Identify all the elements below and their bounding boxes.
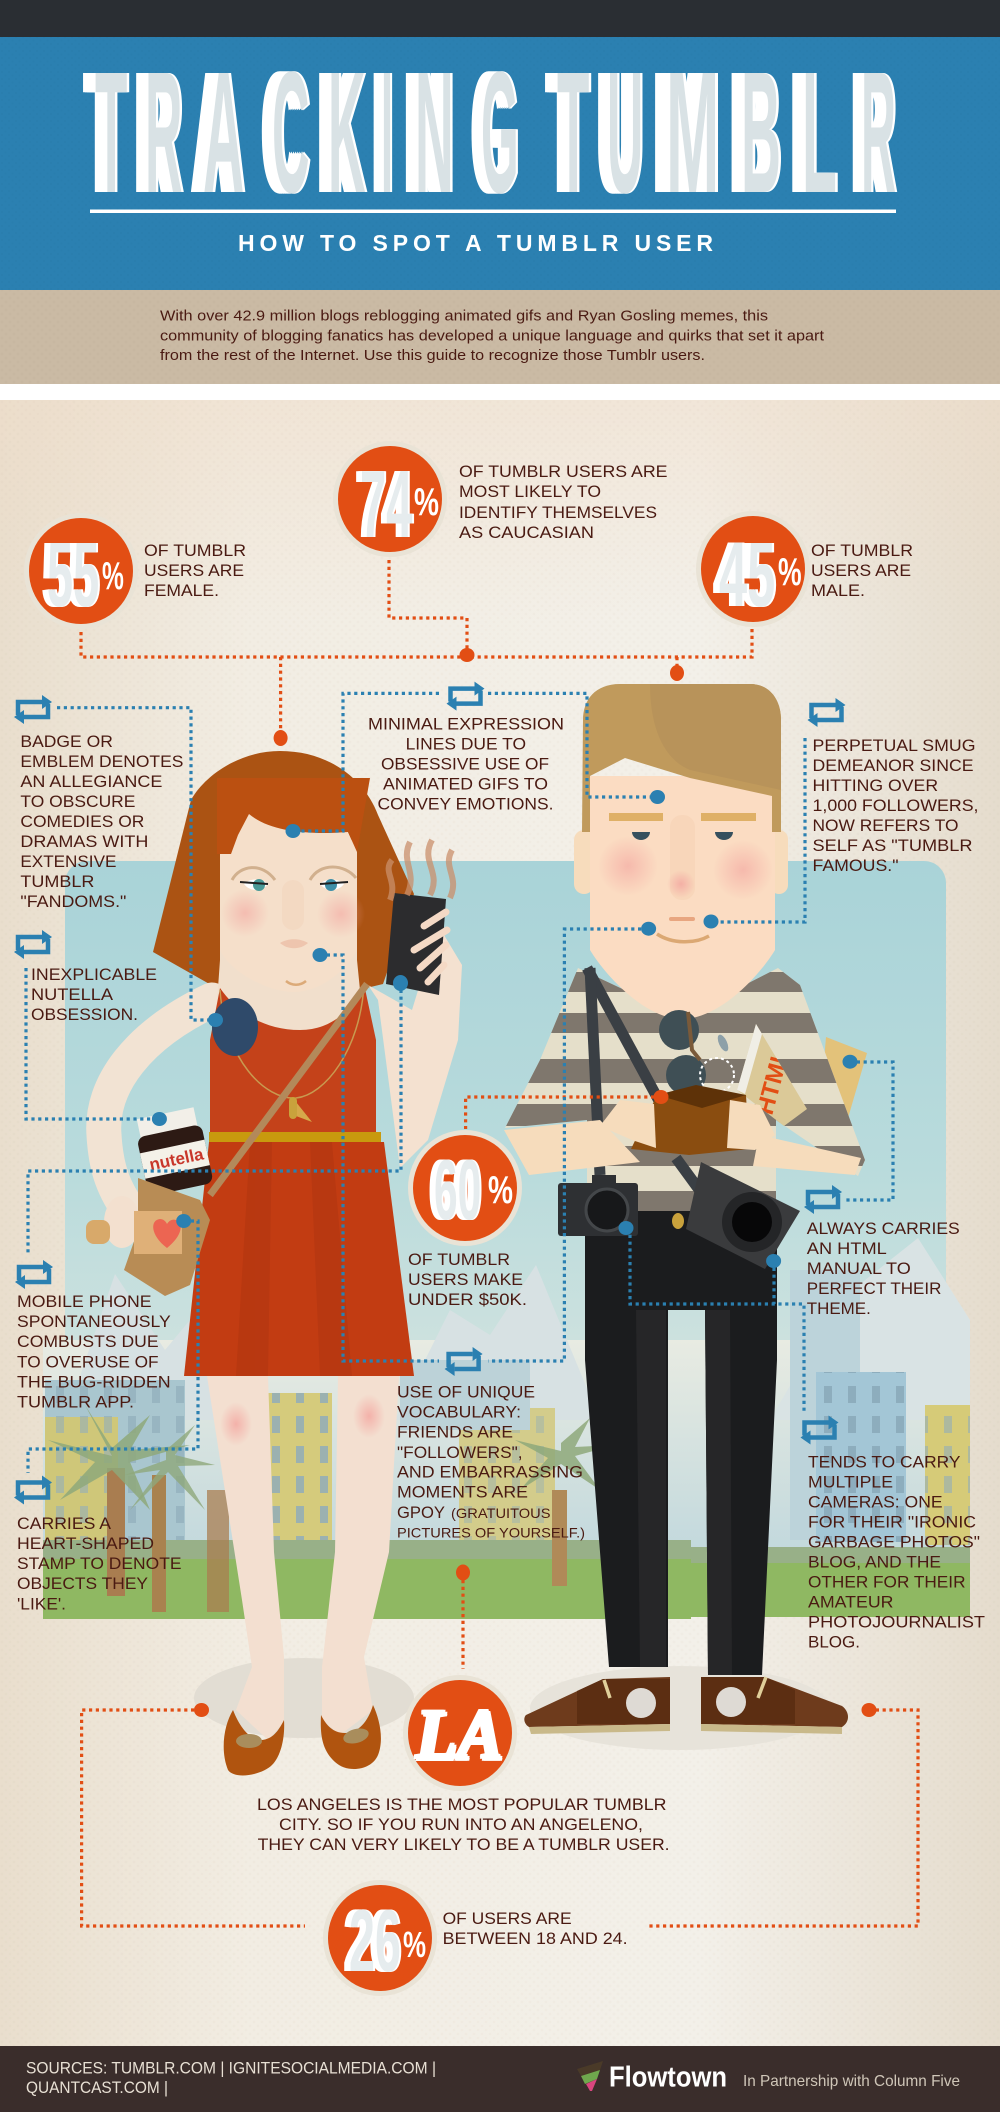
- title: M: [666, 35, 719, 229]
- nutella jar: nutella: [148, 1144, 206, 1174]
- stat badge: 60 percent: 60: [434, 1143, 481, 1238]
- icon: repeat, manual note: [804, 1185, 842, 1214]
- title: R: [861, 35, 896, 229]
- stat badge: LA: [403, 1675, 517, 1791]
- text: 26 percent age: OF USERS ARE: [443, 1910, 572, 1928]
- man pants: [585, 1205, 777, 1675]
- footer sources: SOURCES: TUMBLR.COM | IGNITESOCIALMEDIA.COM |: [26, 2058, 436, 2078]
- woman shoes: [224, 1710, 284, 1775]
- woman bangs: [217, 778, 370, 854]
- title: [83, 35, 898, 229]
- icon: repeat, phone note: [15, 1260, 53, 1289]
- text: perpetual smug demeanor: [812, 737, 978, 875]
- text: unique vocabulary: "FOLLOWERS",: [397, 1444, 523, 1462]
- stat badge: 60 percent: [408, 1130, 522, 1246]
- man shoes: [524, 1677, 848, 1734]
- palm trees: [48, 1405, 615, 1612]
- man forearms and box: [504, 1085, 861, 1175]
- stat badge: 26 percent: %: [403, 1924, 426, 1965]
- text: perpetual smug demeanor: SELF AS "TUMBLR: [812, 837, 973, 855]
- text: nutella obsession: NUTELLA: [31, 986, 113, 1004]
- text: unique vocabulary: MOMENTS ARE: [397, 1484, 528, 1502]
- text: mobile phone combusts: THE BUG-RIDDEN: [17, 1374, 171, 1392]
- text: multiple cameras: BLOG.: [808, 1634, 860, 1652]
- text: 26 percent age: BETWEEN 18 AND 24.: [443, 1930, 628, 1948]
- text: heart stamp: STAMP TO DENOTE: [17, 1555, 182, 1573]
- text: mobile phone combusts: MOBILE PHONE: [17, 1293, 152, 1311]
- text: nutella obsession: [31, 966, 157, 1024]
- figure: woman: [86, 751, 462, 1775]
- text: minimal expression lines: LINES DUE TO: [406, 736, 526, 754]
- icon: repeat, cameras note: [800, 1416, 838, 1444]
- text: nutella obsession: INEXPLICABLE: [31, 966, 157, 984]
- icon: flowtown flag: [577, 2061, 603, 2091]
- text: heart stamp: [17, 1515, 182, 1614]
- figure: man: [500, 684, 870, 1734]
- title: R: [145, 35, 182, 229]
- text: multiple cameras: FOR THEIR "IRONIC: [808, 1514, 976, 1532]
- stat badge: 45 percent: [696, 511, 810, 627]
- text: minimal expression lines: MINIMAL EXPRESSION: [368, 716, 564, 734]
- stat badge: 60 percent: %: [488, 1169, 513, 1212]
- text: html manual: ALWAYS CARRIES: [807, 1220, 960, 1238]
- intro text: [160, 308, 825, 364]
- footer sources: [26, 2058, 436, 2097]
- text: minimal expression lines: OBSESSIVE USE OF: [381, 756, 549, 774]
- text: los angeles: LOS ANGELES IS THE MOST POPULAR TUMBLR: [257, 1796, 667, 1814]
- badge emblem: [212, 998, 258, 1056]
- stat badge: 55 percent: %: [102, 555, 124, 598]
- orange connectors: [81, 560, 918, 1926]
- text: badge or emblem: TO OBSCURE: [20, 793, 135, 811]
- text: 60 percent under 50k: [408, 1251, 527, 1309]
- text: multiple cameras: CAMERAS: ONE: [808, 1494, 943, 1512]
- text: 45 percent male: MALE.: [811, 582, 865, 600]
- text: multiple cameras: OTHER FOR THEIR: [808, 1574, 966, 1592]
- text: los angeles: THEY CAN VERY LIKELY TO BE A TUMBLR USER.: [258, 1836, 670, 1854]
- woman eyes, brows, blush: [221, 867, 365, 985]
- camera left: [558, 1175, 638, 1236]
- text: html manual: [807, 1220, 960, 1318]
- text: los angeles: [257, 1796, 670, 1854]
- city scene backdrop: [43, 861, 970, 1619]
- text: 45 percent male: USERS ARE: [811, 562, 911, 580]
- title: U: [607, 35, 643, 229]
- man eyes, brows, nose, mouth: [598, 813, 773, 942]
- stat badge: 45 percent: 45: [719, 524, 775, 626]
- text: unique vocabulary: USE OF UNIQUE: [397, 1384, 535, 1402]
- fly and dotted circle: [700, 1033, 734, 1092]
- title underline: [90, 210, 896, 213]
- text: badge or emblem: TUMBLR: [20, 873, 94, 891]
- man shirt: [500, 960, 870, 1215]
- text: 55 percent female: USERS ARE: [144, 562, 244, 580]
- text: multiple cameras: PHOTOJOURNALIST: [808, 1614, 985, 1632]
- stat badge: 26 percent: [323, 1880, 437, 1996]
- text: 60 percent under 50k: UNDER $50K.: [408, 1291, 527, 1309]
- text: html manual: AN HTML: [807, 1240, 887, 1258]
- ground shadows: [194, 1658, 830, 1750]
- phone with steam: [386, 840, 453, 995]
- blue dots: [152, 790, 857, 1268]
- text: perpetual smug demeanor: PERPETUAL SMUG: [812, 737, 976, 755]
- text: perpetual smug demeanor: NOW REFERS TO: [812, 817, 959, 835]
- text: multiple cameras: BLOG, AND THE: [808, 1554, 941, 1572]
- text: multiple cameras: GARBAGE PHOTOS": [808, 1534, 980, 1552]
- text: 55 percent female: OF TUMBLR: [144, 542, 246, 560]
- stat badge: 45 percent: %: [778, 551, 802, 594]
- text: unique vocabulary: VOCABULARY:: [397, 1404, 521, 1422]
- text: 74 percent caucasian: AS CAUCASIAN: [459, 524, 594, 542]
- text: multiple cameras: TENDS TO CARRY: [808, 1454, 960, 1472]
- intro text: community of blogging fanatics has developed a unique language and quirks that set it apart: [160, 328, 825, 344]
- intro text: from the rest of the Internet. Use this guide to recognize those Tumblr users.: [160, 347, 705, 364]
- woman back arm: [104, 1000, 212, 1215]
- text: unique vocabulary: FRIENDS ARE: [397, 1424, 513, 1442]
- belt buckle: [672, 1213, 684, 1229]
- text: badge or emblem: BADGE OR: [20, 733, 113, 751]
- text: nutella obsession: OBSESSION.: [31, 1006, 138, 1024]
- text: badge or emblem: EMBLEM DENOTES: [20, 753, 183, 771]
- text: perpetual smug demeanor: HITTING OVER: [812, 777, 938, 795]
- text: mobile phone combusts: TUMBLR APP.: [17, 1394, 134, 1412]
- text: 45 percent male: OF TUMBLR: [811, 542, 913, 560]
- woman hair: [153, 751, 414, 990]
- text: multiple cameras: MULTIPLE: [808, 1474, 893, 1492]
- text: badge or emblem: DRAMAS WITH: [20, 833, 148, 851]
- stat badge: 55 percent: 55: [47, 524, 99, 626]
- nutella jar: [133, 1106, 214, 1196]
- text: html manual: MANUAL TO: [807, 1260, 911, 1278]
- text: los angeles: CITY. SO IF YOU RUN INTO AN ANGELENO,: [279, 1816, 643, 1834]
- title: B: [741, 35, 781, 229]
- text: heart stamp: 'LIKE'.: [17, 1596, 66, 1614]
- text: 74 percent caucasian: IDENTIFY THEMSELVES: [459, 504, 657, 522]
- text: minimal expression lines: ANIMATED GIFS TO: [383, 776, 548, 794]
- intro text: With over 42.9 million blogs reblogging animated gifs and Ryan Gosling memes, this: [160, 308, 768, 324]
- text: 74 percent caucasian: OF TUMBLR USERS ARE: [459, 463, 668, 481]
- woman legs: [207, 1376, 284, 1740]
- text: minimal expression lines: CONVEY EMOTIONS.: [378, 796, 554, 814]
- flowtown logo: Flowtown: [609, 2062, 727, 2094]
- html book: [737, 1024, 807, 1126]
- text: multiple cameras: AMATEUR: [808, 1594, 894, 1612]
- text: 55 percent female: [144, 542, 246, 600]
- text: perpetual smug demeanor: FAMOUS.": [812, 857, 899, 875]
- text: badge or emblem: AN ALLEGIANCE: [20, 773, 162, 791]
- text: perpetual smug demeanor: DEMEANOR SINCE: [812, 757, 974, 775]
- text: badge or emblem: [20, 733, 183, 911]
- text: 55 percent female: FEMALE.: [144, 582, 219, 600]
- text: badge or emblem: "FANDOMS.": [20, 893, 127, 911]
- icon: repeat, smug note: [808, 698, 846, 727]
- partnership line: In Partnership with Column Five: [743, 2073, 960, 2090]
- text: perpetual smug demeanor: 1,000 FOLLOWERS,: [812, 797, 978, 815]
- title: N: [415, 35, 454, 229]
- text: mobile phone combusts: COMBUSTS DUE: [17, 1333, 159, 1351]
- text: heart stamp: HEART-SHAPED: [17, 1535, 154, 1553]
- woman forward arm: [368, 925, 462, 1168]
- icon: repeat, badge note: [14, 695, 52, 724]
- stat badge: LA: LA: [416, 1695, 503, 1775]
- text: 60 percent under 50k: OF TUMBLR: [408, 1251, 510, 1269]
- title: I: [381, 35, 393, 229]
- top dark bar: [0, 0, 1000, 37]
- text: html manual: THEME.: [807, 1300, 871, 1318]
- intro band: [0, 290, 1000, 384]
- blue header band: [0, 37, 1000, 290]
- camera straps: [587, 968, 703, 1195]
- title: T: [557, 35, 589, 229]
- stat badge: 26 percent: 26: [349, 1891, 401, 1990]
- stat badge: 55 percent: [24, 513, 138, 629]
- text: 60 percent under 50k: USERS MAKE: [408, 1271, 523, 1289]
- text: html manual: PERFECT THEIR: [807, 1280, 941, 1298]
- footer sources: QUANTCAST.COM |: [26, 2078, 168, 2097]
- stat badge: 74 percent: [333, 441, 447, 557]
- man ears: [574, 830, 788, 894]
- text: heart stamp: OBJECTS THEY: [17, 1575, 148, 1593]
- icon: repeat, nutella note: [14, 930, 52, 959]
- text: multiple cameras: [808, 1454, 985, 1652]
- text: mobile phone combusts: TO OVERUSE OF: [17, 1354, 159, 1372]
- text: heart stamp: CARRIES A: [17, 1515, 111, 1533]
- text: badge or emblem: EXTENSIVE: [20, 853, 116, 871]
- text: mobile phone combusts: [17, 1293, 171, 1412]
- title: C: [272, 35, 309, 229]
- text: unique vocabulary: AND EMBARRASSING: [397, 1464, 583, 1482]
- text: unique vocabulary: GPOY: [397, 1504, 445, 1522]
- icon: repeat, vocabulary note: [445, 1347, 483, 1376]
- title: K: [328, 35, 365, 229]
- bag with stamp: [86, 984, 367, 1296]
- text: 45 percent male: [811, 542, 913, 600]
- footer band: [0, 2046, 1000, 2112]
- text: badge or emblem: COMEDIES OR: [20, 813, 144, 831]
- woman necklace: [220, 985, 364, 1098]
- text: 74 percent caucasian: [459, 463, 668, 542]
- stat badge: 74 percent: %: [414, 481, 439, 524]
- text: 74 percent caucasian: MOST LIKELY TO: [459, 483, 601, 501]
- orange dots: [194, 648, 876, 1717]
- woman dress: [210, 984, 376, 1132]
- title: L: [802, 35, 837, 229]
- manual behind arm: [820, 1037, 867, 1118]
- stat badge: 74 percent: 74: [360, 451, 412, 558]
- title: A: [203, 35, 244, 229]
- html book: HTML: [752, 1046, 795, 1118]
- sunglasses: [659, 1010, 706, 1095]
- man hair: [582, 684, 781, 832]
- text: unique vocabulary: [397, 1384, 585, 1540]
- icon: repeat, expression note: [446, 682, 484, 711]
- text: minimal expression lines: [368, 716, 564, 814]
- text: unique vocabulary: PICTURES OF YOURSELF.): [397, 1524, 585, 1540]
- subtitle: HOW TO SPOT A TUMBLR USER: [238, 230, 713, 256]
- woman neck and face: [215, 840, 364, 1030]
- blue connectors: [26, 693, 893, 1473]
- text: unique vocabulary: (GRATUITOUS: [451, 1505, 550, 1521]
- icon: repeat, stamp note: [14, 1476, 52, 1504]
- camera right: [686, 1162, 800, 1269]
- text: 26 percent age: [443, 1910, 628, 1948]
- text: mobile phone combusts: SPONTANEOUSLY: [17, 1313, 171, 1331]
- main cream background: [0, 400, 1000, 2047]
- title: G: [481, 35, 519, 229]
- man neck and face: [590, 776, 775, 1019]
- title: T: [95, 35, 127, 229]
